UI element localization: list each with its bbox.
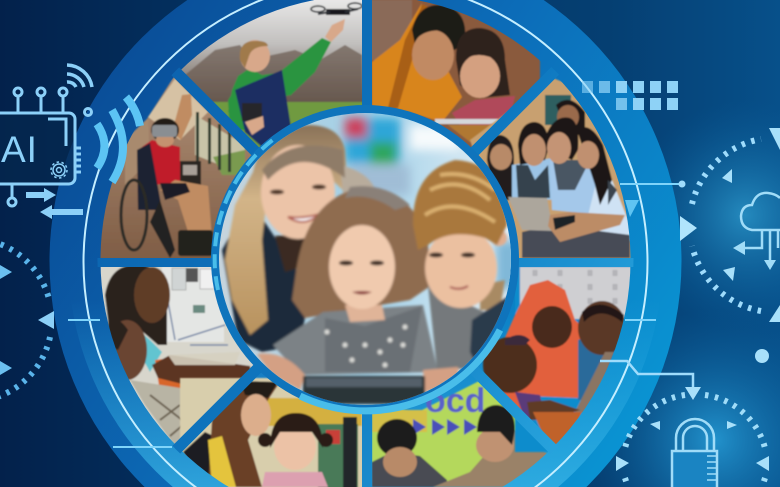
third girl xyxy=(550,160,600,214)
fourth girl xyxy=(588,180,630,241)
second girl xyxy=(512,158,555,200)
tablet and hands xyxy=(257,353,460,404)
photo: boy flying drone xyxy=(181,0,362,148)
icon: gear xyxy=(51,162,67,178)
photo: boys at a colourful wall: ocd xyxy=(425,382,485,420)
icon: cloud xyxy=(741,193,780,262)
arrow to lock xyxy=(600,361,701,400)
laptop xyxy=(508,197,553,231)
connector lines xyxy=(68,184,682,447)
icon: wifi signal xyxy=(67,65,92,87)
central photo: teacher with two children at a tablet xyxy=(215,110,520,410)
photo: students with laptop xyxy=(470,78,630,258)
lock dial xyxy=(616,395,769,487)
dot xyxy=(755,349,769,363)
connector dot xyxy=(678,180,686,188)
separator spokes xyxy=(80,0,650,487)
photo: girl in red hijab with children xyxy=(483,262,640,452)
teacher xyxy=(222,125,376,352)
photo: teacher and smiling toddler xyxy=(180,378,370,487)
photo: boys at a colourful wall xyxy=(372,377,550,487)
photo: woman in sari with girl xyxy=(370,0,540,150)
grid of squares xyxy=(582,81,678,110)
girl xyxy=(273,186,438,375)
left dial xyxy=(0,241,54,399)
central photo ring xyxy=(211,105,519,413)
photo: child in wheelchair with VR headset xyxy=(95,75,255,262)
icon: arrows right and left xyxy=(26,188,83,219)
lower band highlight xyxy=(68,0,662,487)
triangle marker on ring xyxy=(625,200,639,217)
photo: girl with electronics kit xyxy=(95,262,255,452)
white thin orbit ring xyxy=(84,0,648,487)
left girl xyxy=(487,135,514,200)
skirts xyxy=(521,230,630,258)
label: AI: AI xyxy=(1,129,38,170)
back girl xyxy=(556,100,585,135)
icon: padlock xyxy=(672,419,717,487)
icon: AI chip xyxy=(0,65,92,206)
blurred classroom background xyxy=(345,118,520,290)
photo collage xyxy=(95,0,650,487)
light blue arcs xyxy=(97,97,140,182)
boy xyxy=(413,160,510,370)
right dial with cloud xyxy=(680,128,780,322)
